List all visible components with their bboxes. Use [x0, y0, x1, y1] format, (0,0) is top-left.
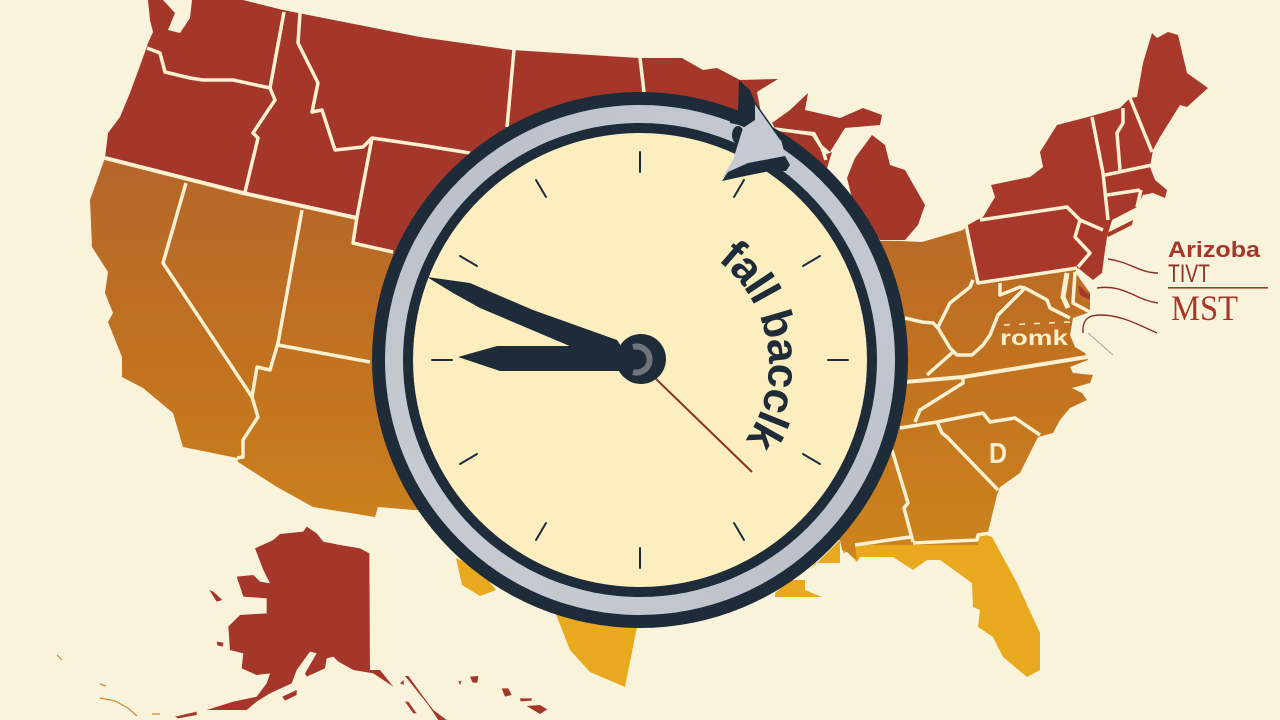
map: western orange states: [90, 158, 640, 517]
map: state label on South Carolina: D: [989, 438, 1007, 470]
clock: hour hand: [458, 345, 630, 371]
clock: hub: [616, 334, 666, 384]
map: faint marks above Virginia label: [1004, 322, 1070, 325]
map: southern yellow states: [456, 533, 1040, 687]
clock: minute hand: [427, 277, 630, 360]
clock: [372, 80, 908, 628]
map: Aleutian islands trail: [57, 655, 160, 716]
time zone label: Arizona MST: TIVT: [1168, 260, 1210, 288]
map: Great Lakes red states: [770, 93, 925, 240]
clock: curved caption: [721, 241, 793, 452]
map: eastern orange states: [800, 225, 1093, 560]
map: Alaska: [175, 527, 547, 720]
clock: bezel: [372, 92, 908, 628]
leader lines to time zone label: [1083, 259, 1158, 355]
time zone label: Arizona MST: MST: [1171, 288, 1238, 328]
clock: face: [413, 133, 867, 587]
clock: rotation arrow head: [722, 80, 790, 181]
map: western red states: [105, 0, 778, 280]
map: state label on Virginia: romk: [1000, 327, 1068, 350]
clock: curved caption: fall bacclk: [721, 241, 793, 452]
map: northeast red states: [968, 32, 1208, 300]
time zone label: Arizona MST: [1168, 237, 1268, 328]
clock: tick marks: [432, 152, 848, 568]
map: Puget Sound notch: [163, 0, 192, 33]
time zone label: Arizona MST: Arizoba: [1168, 237, 1261, 262]
clock: second hand: [655, 378, 752, 472]
map: state borders: [105, 12, 1152, 545]
